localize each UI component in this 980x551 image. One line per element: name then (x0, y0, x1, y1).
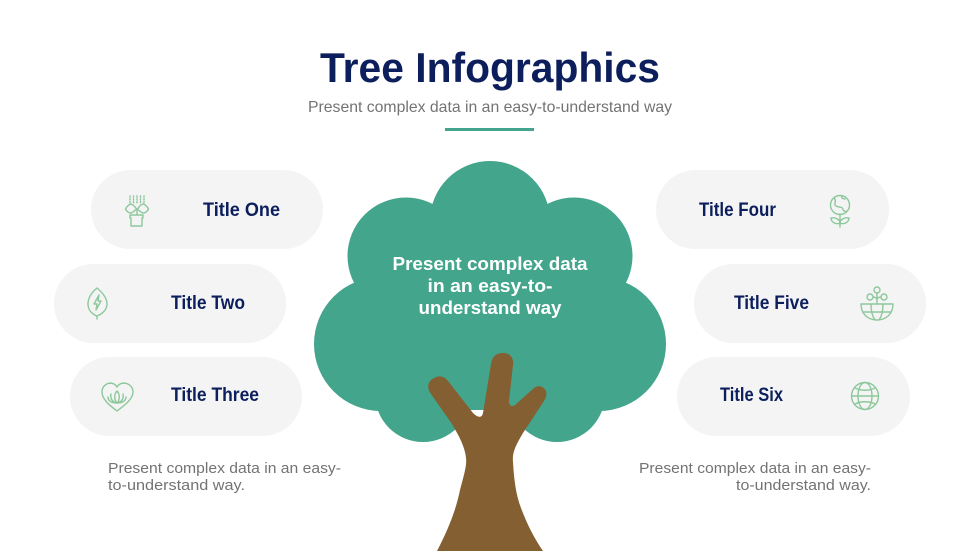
label: title two: Title Two (171, 293, 245, 314)
tree text (392, 254, 589, 318)
icon: globe flower (830, 196, 850, 227)
tree crown (314, 161, 666, 442)
icon: watered plant pot (126, 196, 148, 226)
panel: title three (70, 357, 302, 436)
subtitle: Present complex data in an easy-to-understand way (308, 99, 672, 116)
panel: title two (54, 264, 286, 343)
icon: globe (852, 382, 878, 410)
tree text: Present complex data (392, 254, 589, 274)
right caption: Present complex data in an easy- (639, 460, 871, 477)
label: title four: Title Four (699, 200, 777, 221)
icon: leaf with bolt (88, 288, 107, 319)
panel: title five (694, 264, 926, 343)
label: title one: Title One (203, 200, 280, 221)
title: Tree Infographics (320, 44, 660, 91)
label: title three: Title Three (171, 385, 259, 406)
tree trunk (428, 353, 546, 551)
left caption: to-understand way. (108, 477, 245, 494)
tree text: in an easy-to- (428, 276, 552, 296)
label: title five: Title Five (734, 293, 809, 314)
panel: title six (677, 357, 910, 436)
panel: title one (91, 170, 323, 249)
icon: heart with lotus (102, 383, 133, 411)
right caption: to-understand way. (736, 477, 871, 494)
tree text: understand way (418, 298, 562, 318)
icon: sprout on half globe (861, 287, 893, 320)
panel: title four (656, 170, 889, 249)
label: title six: Title Six (720, 385, 783, 406)
left caption (108, 460, 341, 494)
right caption (639, 460, 871, 494)
left caption: Present complex data in an easy- (108, 460, 341, 477)
